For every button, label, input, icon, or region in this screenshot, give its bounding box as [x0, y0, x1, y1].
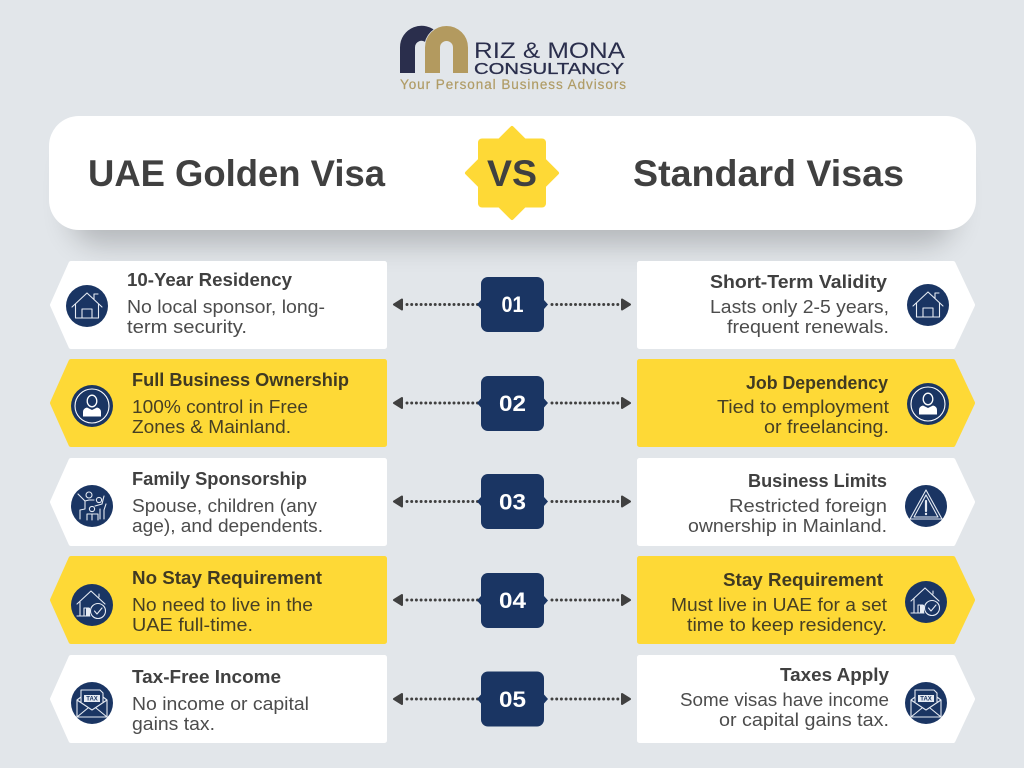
- icon: family: [71, 485, 113, 527]
- icon: house: [907, 284, 949, 326]
- body: or freelancing.: [764, 417, 889, 437]
- body: No income or capital: [132, 694, 309, 714]
- body: Some visas have income: [680, 690, 889, 710]
- row 3 number connector: [394, 474, 630, 529]
- title: Full Business Ownership: [132, 370, 349, 390]
- body: 100% control in Free: [132, 397, 308, 417]
- title: No Stay Requirement: [132, 568, 322, 588]
- icon: house check: [71, 584, 113, 626]
- row 1 left: 10-Year Residency: [52, 264, 384, 346]
- icon: person: [71, 385, 113, 427]
- body: or capital gains tax.: [719, 710, 889, 730]
- row 2 right: Job Dependency: [640, 362, 972, 444]
- body: Lasts only 2-5 years,: [710, 297, 889, 317]
- body: [132, 694, 309, 734]
- logo sub name: CONSULTANCY: [474, 61, 624, 78]
- VS badge: [467, 128, 557, 218]
- body: gains tax.: [132, 714, 215, 734]
- icon: tax envelope: [905, 682, 947, 724]
- logo name: RIZ & MONA: [474, 38, 625, 63]
- body: [127, 297, 325, 337]
- title: Family Sponsorship: [132, 469, 307, 489]
- title: Job Dependency: [746, 373, 888, 393]
- logo mark: [407, 33, 460, 73]
- VS badge: VS: [487, 153, 537, 194]
- row 5 number connector: 05: [499, 687, 526, 712]
- body: [132, 496, 323, 536]
- body: No local sponsor, long-: [127, 297, 325, 317]
- body: Spouse, children (any: [132, 496, 317, 516]
- logo tagline: Your Personal Business Advisors: [400, 77, 626, 92]
- title: Taxes Apply: [780, 665, 889, 685]
- row 4 number connector: [394, 573, 630, 628]
- title: 10-Year Residency: [127, 270, 292, 290]
- heading: Standard Visas: Standard Visas: [633, 153, 904, 194]
- row 4 right: Stay Requirement: [640, 558, 972, 642]
- row 4 number connector: 04: [499, 588, 527, 613]
- body: term security.: [127, 317, 247, 337]
- body: ownership in Mainland.: [688, 516, 887, 536]
- body: [717, 397, 889, 437]
- icon: tax envelope: [71, 682, 113, 724]
- row 3 left: Family Sponsorship: [52, 460, 384, 544]
- body: Must live in UAE for a set: [671, 595, 887, 615]
- title: Tax-Free Income: [132, 667, 281, 687]
- title: Business Limits: [748, 471, 887, 491]
- row 5 number connector: [394, 672, 630, 726]
- row 3 number connector: 03: [499, 490, 526, 514]
- title: Short-Term Validity: [710, 272, 887, 292]
- icon: warning: [905, 485, 947, 527]
- row 2 number connector: 02: [499, 391, 526, 416]
- body: [671, 595, 887, 635]
- row 4 left: No Stay Requirement: [52, 558, 384, 642]
- body: time to keep residency.: [687, 615, 887, 635]
- row 3 right: Business Limits: [640, 460, 972, 544]
- icon: person: [907, 383, 949, 425]
- row 1 number connector: 01: [502, 292, 524, 317]
- row 2 number connector: [394, 376, 630, 431]
- logo: [400, 33, 626, 92]
- body: age), and dependents.: [132, 516, 323, 536]
- icon: house: [66, 285, 108, 327]
- header shadow: [70, 145, 955, 245]
- body: Zones & Mainland.: [132, 417, 291, 437]
- heading: UAE Golden Visa: UAE Golden Visa: [88, 153, 385, 194]
- body: [710, 297, 889, 337]
- title: Stay Requirement: [723, 570, 883, 590]
- body: [132, 595, 313, 635]
- row 1 number connector: [394, 277, 630, 332]
- body: [688, 496, 887, 536]
- row 5 right: Taxes Apply: [640, 658, 972, 740]
- row 5 left: Tax-Free Income: [52, 658, 384, 740]
- body: Restricted foreign: [729, 496, 887, 516]
- body: Tied to employment: [717, 397, 889, 417]
- body: No need to live in the: [132, 595, 313, 615]
- body: [680, 690, 889, 730]
- row 1 right: Short-Term Validity: [640, 264, 972, 346]
- body: [132, 397, 308, 437]
- row 2 left: Full Business Ownership: [52, 362, 384, 444]
- header card: [49, 116, 976, 230]
- body: frequent renewals.: [727, 317, 889, 337]
- body: UAE full-time.: [132, 615, 253, 635]
- icon: house check: [905, 581, 947, 623]
